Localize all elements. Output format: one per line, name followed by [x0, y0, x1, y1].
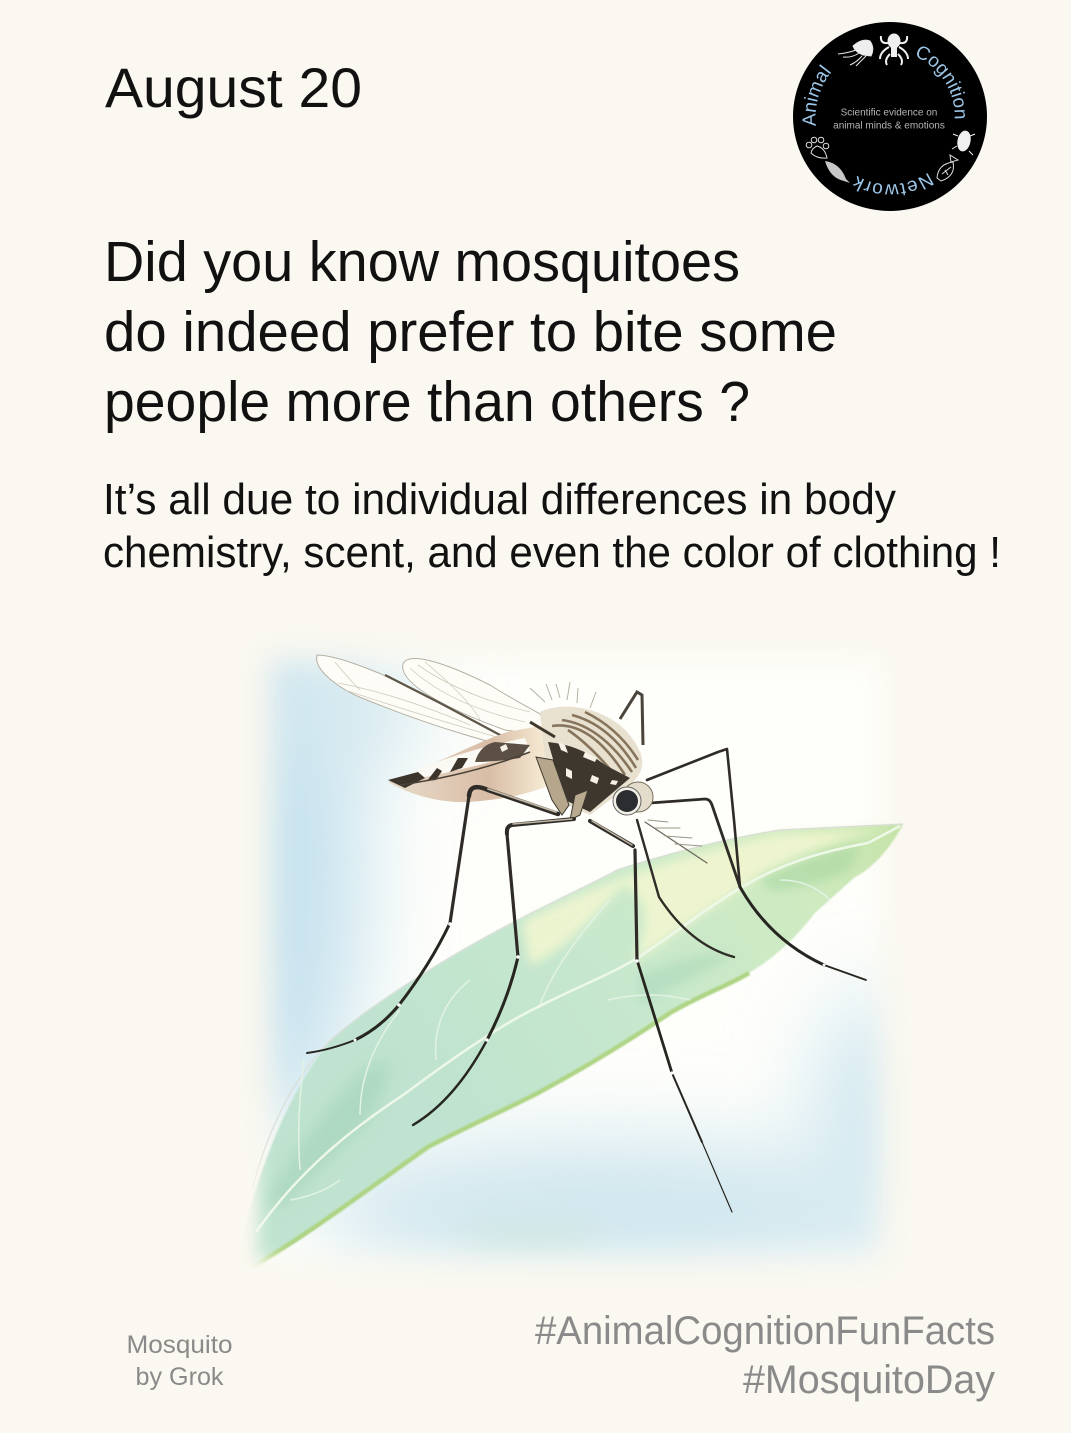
hashtags	[535, 1309, 995, 1402]
hashtags: #MosquitoDay	[743, 1358, 995, 1402]
logo text: Cognition: Cognition	[917, 46, 965, 118]
logo: Animal Cognition Network: animal minds & emotions	[833, 120, 945, 132]
abdomen	[388, 725, 556, 802]
front leg upper	[647, 749, 740, 887]
image caption: by Grok	[136, 1363, 224, 1391]
image caption: Mosquito	[126, 1331, 232, 1359]
leg joints	[354, 922, 825, 1075]
main question heading: do indeed prefer to bite some	[104, 300, 837, 364]
icon: octopus	[880, 34, 908, 65]
leaf	[235, 824, 903, 1272]
date heading: August 20	[105, 56, 362, 119]
watercolor background wash	[257, 649, 890, 1268]
icon: paw	[806, 137, 829, 158]
main question heading: Did you know mosquitoes	[104, 230, 740, 294]
logo tagline: Scientific evidence on	[841, 108, 937, 118]
side veins	[290, 880, 830, 1200]
explanation text: It’s all due to individual differences in body	[103, 475, 896, 524]
logo text: Animal: Animal	[802, 64, 831, 126]
illustration: mosquito on leaf	[249, 649, 904, 1268]
legs	[307, 749, 866, 1212]
thorax	[530, 682, 642, 820]
wings	[317, 655, 560, 757]
icon: jellyfish	[838, 40, 873, 66]
image caption	[126, 1331, 232, 1391]
middle leg right	[590, 821, 732, 1212]
far hind leg	[620, 692, 643, 745]
hind leg left	[307, 787, 558, 1053]
explanation text	[103, 475, 1001, 577]
leaf outline upper	[252, 824, 903, 1190]
proboscis	[637, 820, 734, 957]
explanation text: chemistry, scent, and even the color of clothing !	[103, 528, 1001, 577]
icon: feather	[825, 161, 850, 183]
front leg lower	[650, 799, 866, 980]
logo text: Network: Network	[852, 173, 934, 196]
green lower margin	[250, 973, 749, 1268]
middle leg left	[413, 819, 574, 1125]
leaf shadow areas	[271, 1064, 387, 1203]
hashtags: #AnimalCognitionFunFacts	[535, 1309, 995, 1353]
icon: fish	[937, 155, 958, 181]
main question heading: people more than others ?	[104, 370, 750, 434]
main question heading	[104, 230, 837, 434]
midrib	[256, 826, 900, 1232]
icon: beetle	[952, 130, 975, 155]
antenna	[645, 820, 707, 863]
pale yellow upper leaf area	[522, 828, 890, 965]
logo: Animal Cognition Network	[793, 22, 987, 211]
head and eye	[613, 782, 653, 815]
